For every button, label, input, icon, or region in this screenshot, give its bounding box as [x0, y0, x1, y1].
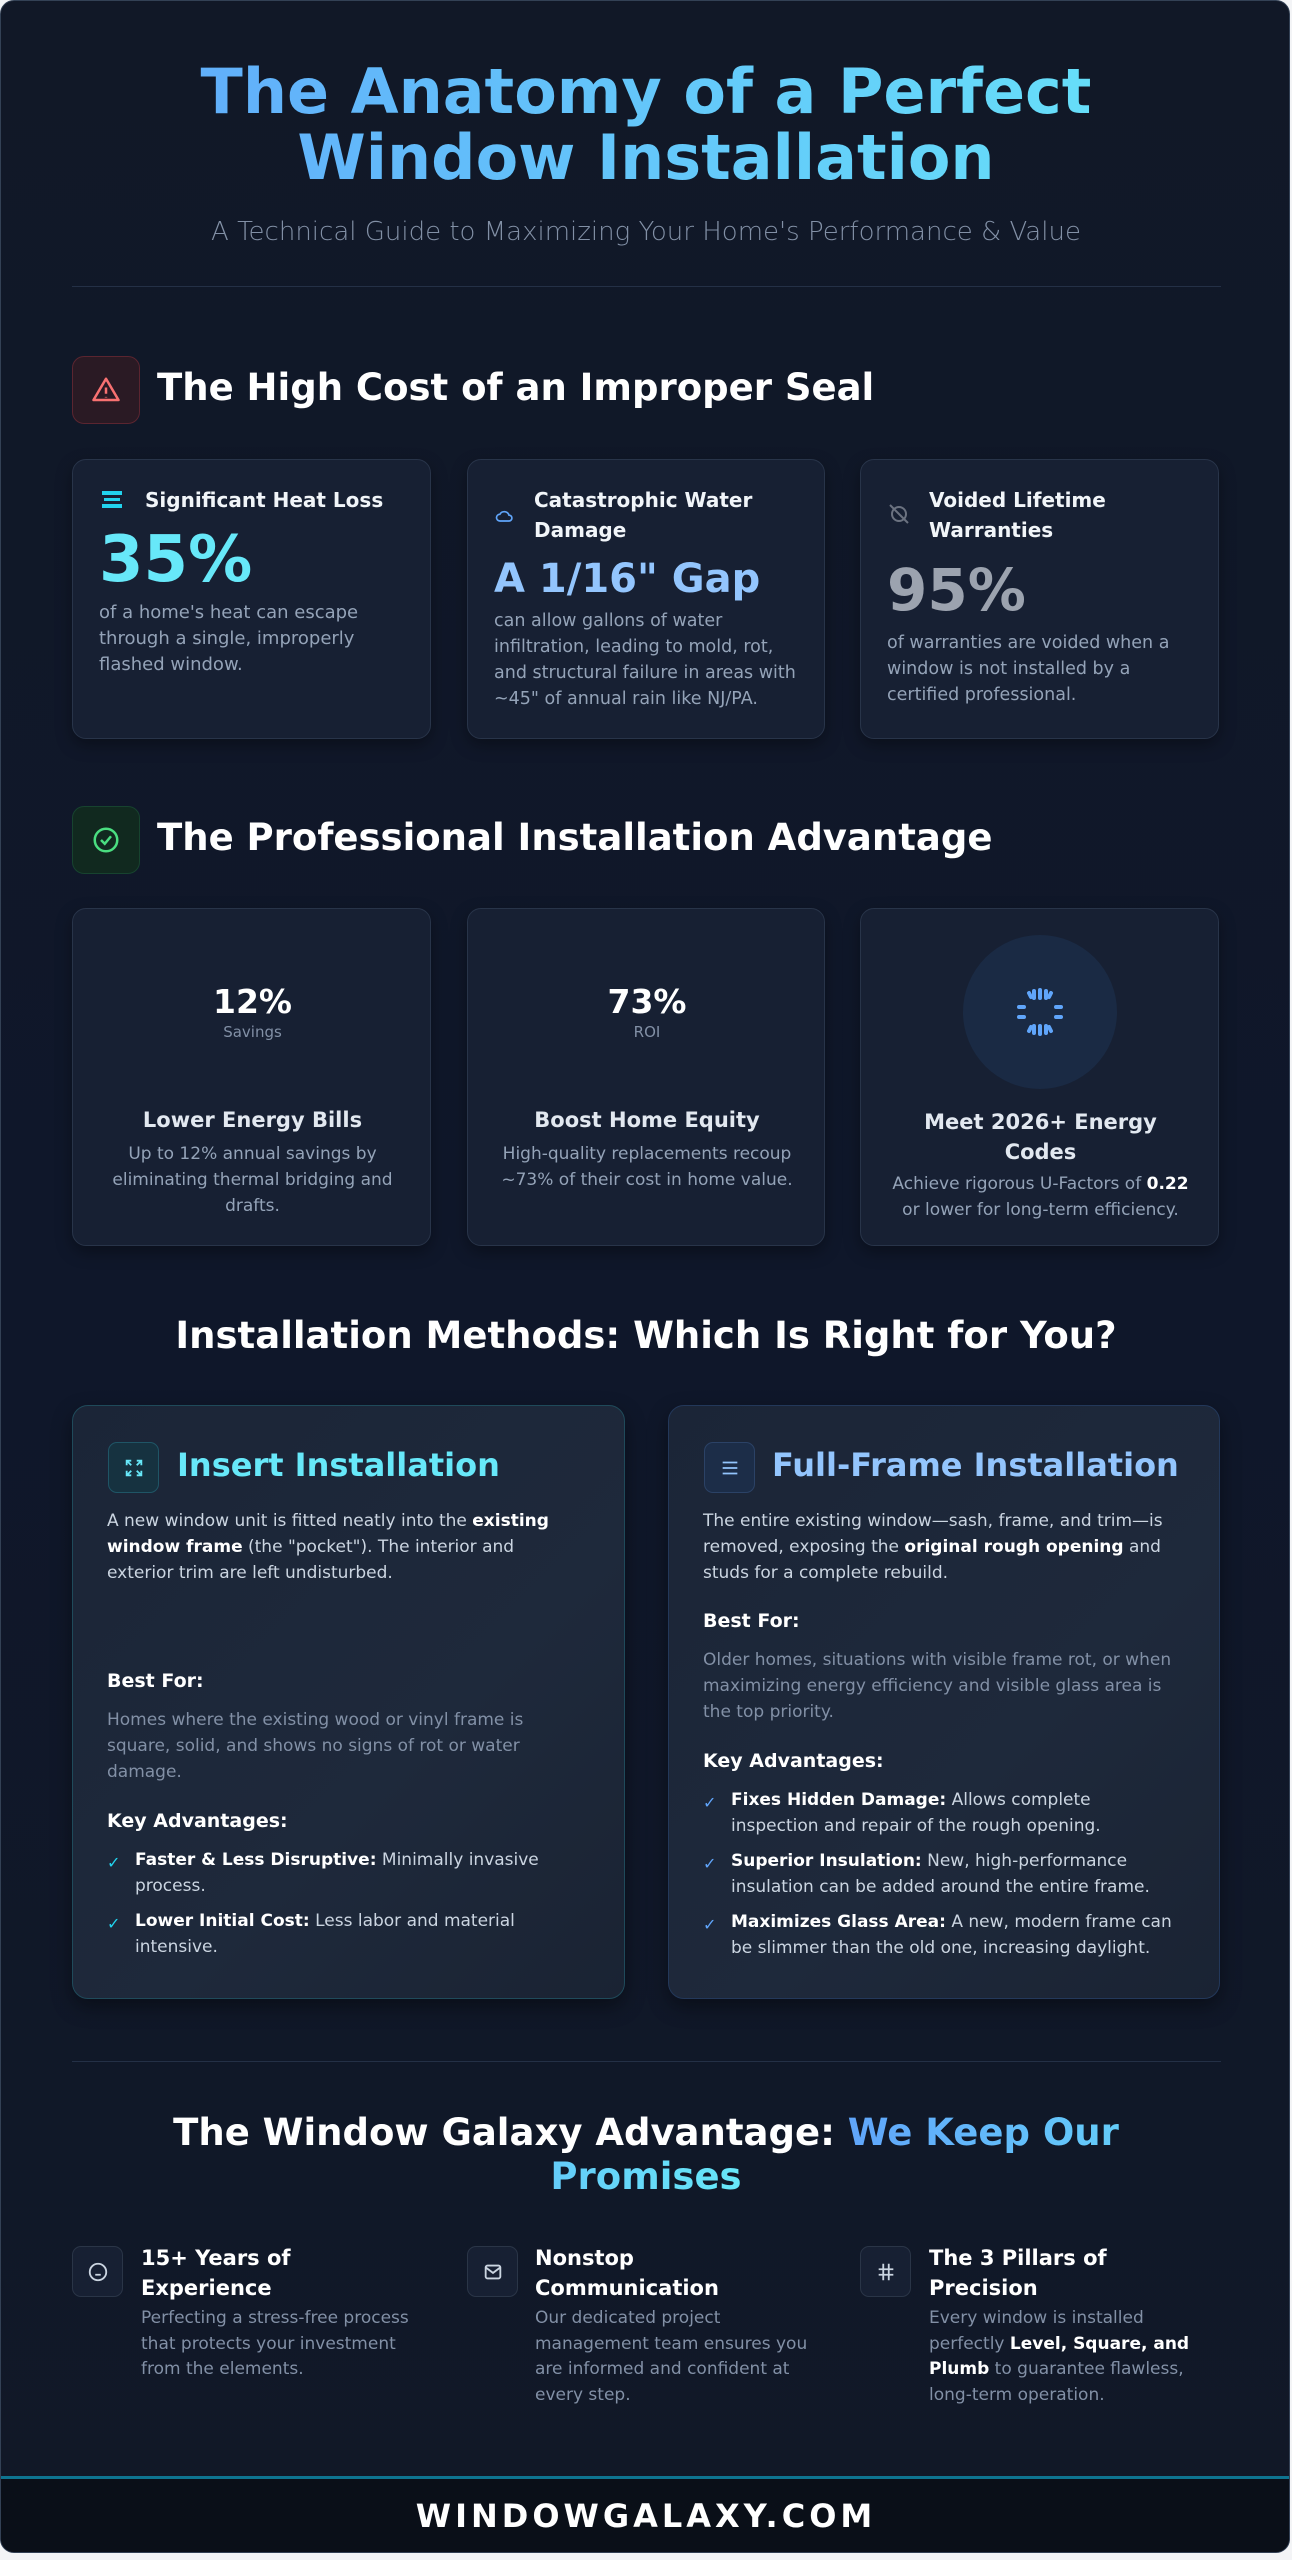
icon: smile: [72, 2246, 123, 2297]
card: energy bills: Savings: [223, 1023, 282, 1041]
footer: WINDOWGALAXY.COM: [416, 2497, 876, 2535]
card: heat loss: Significant Heat Loss: [145, 488, 383, 512]
panel: insert installation: Insert Installation: [177, 1446, 500, 1484]
feature: experience: Perfecting a stress-free process that protects your investment from the elements.: [141, 2308, 409, 2379]
panel: insert installation: ✓: [107, 1853, 120, 1872]
panel: full-frame installation: ✓: [703, 1854, 716, 1873]
panel: insert installation: A new window unit is fitted neatly into the existing window frame (the "pocket"). The interior and exterior trim are left undisturbed.: [107, 1511, 549, 1583]
card: energy codes: Achieve rigorous U-Factors of 0.22 or lower for long-term efficiency.: [892, 1174, 1189, 1220]
card: energy bills: [72, 908, 431, 1246]
icon: drop: [496, 510, 513, 522]
feature: experience: 15+ Years of Experience: [141, 2246, 291, 2300]
panel: full-frame installation: Full-Frame Installation: [772, 1446, 1179, 1484]
icon: shield off: [889, 504, 909, 524]
feature: precision: [860, 2246, 1189, 2404]
panel: full-frame installation: Key Advantages:: [703, 1750, 884, 1772]
card: water damage: [467, 459, 825, 739]
card: water damage: Catastrophic Water Damage: [534, 488, 752, 542]
panel: insert installation: Homes where the existing wood or vinyl frame is square, solid, and shows no signs of rot or water damage.: [107, 1710, 523, 1782]
card: home equity: High-quality replacements recoup ~73% of their cost in home value.: [501, 1144, 793, 1190]
card: home equity: 73%: [608, 982, 686, 1021]
feature: precision: Every window is installed perfectly Level, Square, and Plumb to guarantee flawless, long-term operation.: [929, 2308, 1189, 2404]
card: heat loss: of a home's heat can escape through a single, improperly flashed window.: [99, 602, 358, 675]
icon: heat: [102, 491, 122, 508]
icon: menu: [704, 1442, 755, 1493]
feature: experience: [72, 2246, 409, 2379]
heading: window galaxy advantage: The Window Galaxy Advantage: We Keep Our Promises: [173, 2111, 1119, 2198]
card: energy bills: Up to 12% annual savings by eliminating thermal bridging and drafts.: [112, 1144, 393, 1216]
subtitle: A Technical Guide to Maximizing Your Home's Performance & Value: [211, 217, 1081, 247]
panel: insert installation: ✓: [107, 1914, 120, 1933]
card: home equity: ROI: [634, 1023, 660, 1041]
card: heat loss: [72, 459, 431, 739]
card: home equity: Boost Home Equity: [534, 1108, 760, 1132]
panel: full-frame installation: ✓: [703, 1915, 716, 1934]
panel: insert installation: Lower Initial Cost: Less labor and material intensive.: [135, 1911, 515, 1957]
card: warranties: of warranties are voided when a window is not installed by a certified professional.: [887, 633, 1169, 705]
panel: full-frame installation: ✓: [703, 1793, 716, 1812]
panel: insert installation: Key Advantages:: [107, 1810, 288, 1832]
card: energy codes: [860, 908, 1219, 1246]
icon: warning: [72, 356, 140, 424]
feature: communication: Nonstop Communication: [535, 2246, 719, 2300]
icon: hash: [860, 2246, 911, 2297]
panel: full-frame installation: [668, 1405, 1220, 1999]
panel: insert installation: Faster & Less Disruptive: Minimally invasive process.: [135, 1850, 539, 1896]
panel: insert installation: [72, 1405, 625, 1999]
panel: full-frame installation: Older homes, situations with visible frame rot, or when maximizing energy efficiency and visible glass area is the top priority.: [703, 1650, 1171, 1722]
feature: precision: The 3 Pillars of Precision: [929, 2246, 1107, 2300]
feature: communication: [467, 2246, 807, 2404]
card: warranties: [860, 459, 1219, 739]
panel: full-frame installation: Fixes Hidden Damage: Allows complete inspection and repair of the rough opening.: [731, 1790, 1101, 1836]
card: warranties: Voided Lifetime Warranties: [929, 488, 1106, 542]
title: [1, 59, 1291, 191]
panel: full-frame installation: Maximizes Glass Area: A new, modern frame can be slimmer than the old one, increasing daylight.: [731, 1912, 1172, 1958]
heading: professional advantage: The Professional Installation Advantage: [157, 816, 992, 859]
card: energy bills: Lower Energy Bills: [143, 1108, 362, 1132]
panel: insert installation: Best For:: [107, 1670, 204, 1692]
title: The Anatomy of a Perfect: [201, 55, 1091, 128]
card: water damage: can allow gallons of water infiltration, leading to mold, rot, and structural failure in areas with ~45" of annual rain like NJ/PA.: [494, 611, 796, 709]
card: energy codes: Meet 2026+ Energy Codes: [924, 1110, 1157, 1164]
icon: loader circle: [963, 935, 1117, 1089]
icon: expand: [108, 1442, 159, 1493]
card: energy bills: 12%: [213, 982, 292, 1021]
card: warranties: 95%: [887, 556, 1026, 624]
card: water damage: A 1/16" Gap: [494, 556, 760, 602]
icon: mail: [467, 2246, 518, 2297]
panel: full-frame installation: Best For:: [703, 1610, 800, 1632]
title: Window Installation: [297, 121, 995, 194]
footer: [1, 2476, 1291, 2556]
card: heat loss: 35%: [99, 523, 252, 597]
card: home equity: [467, 908, 825, 1246]
panel: full-frame installation: Superior Insulation: New, high-performance insulation can be added around the entire frame.: [731, 1851, 1150, 1897]
heading: installation methods: Installation Methods: Which Is Right for You?: [175, 1314, 1117, 1357]
heading: high cost: The High Cost of an Improper Seal: [157, 366, 874, 409]
feature: communication: Our dedicated project management team ensures you are informed and confident at every step.: [535, 2308, 807, 2404]
icon: check: [72, 806, 140, 874]
panel: full-frame installation: The entire existing window—sash, frame, and trim—is removed, exposing the original rough opening and studs for a complete rebuild.: [703, 1511, 1163, 1583]
